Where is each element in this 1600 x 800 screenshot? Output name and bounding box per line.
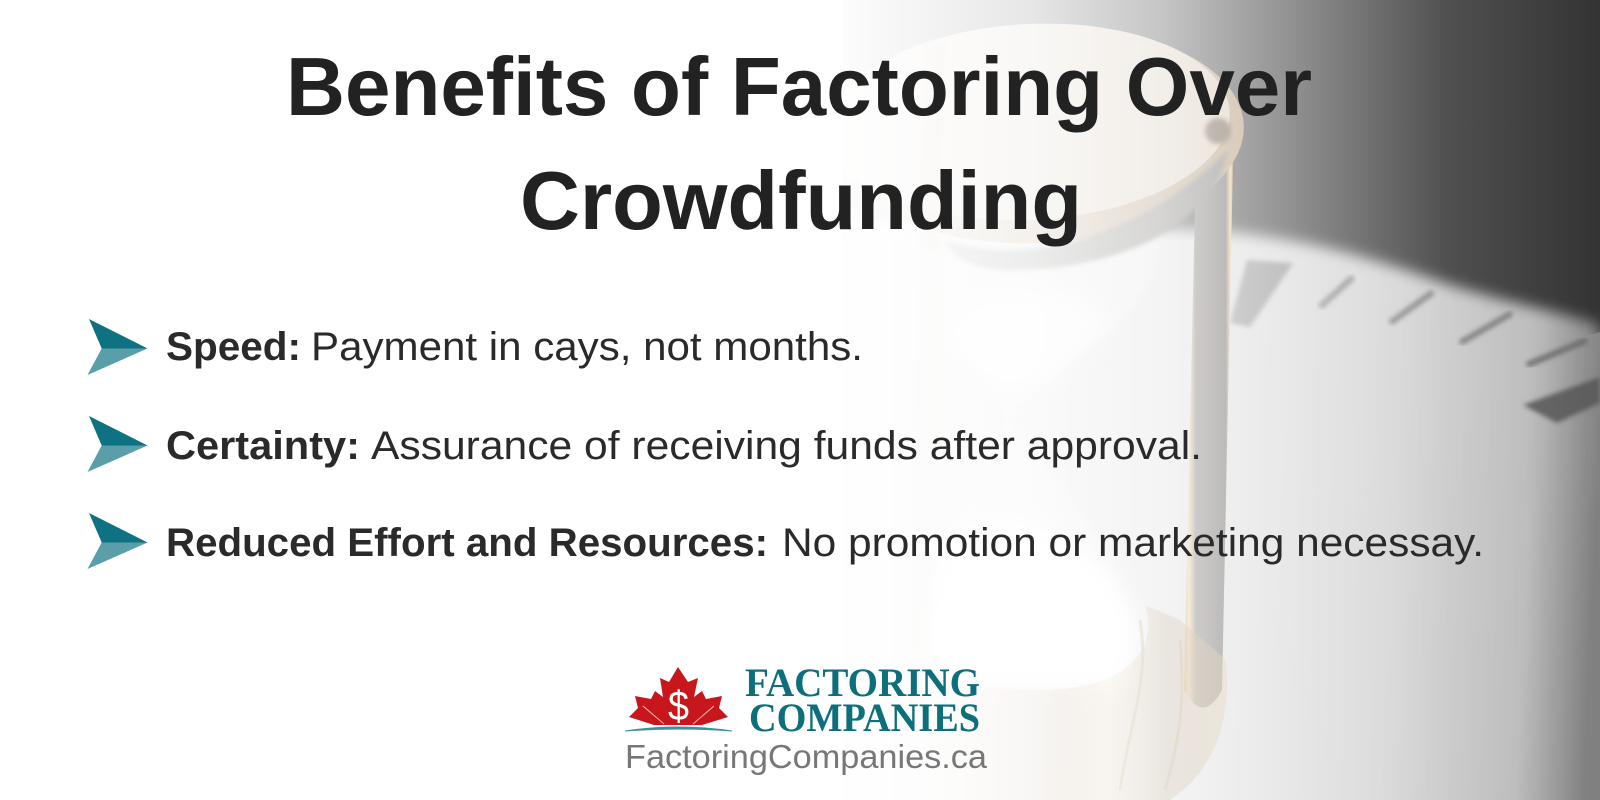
- icon: arrow: [88, 416, 148, 472]
- icon: maple leaf: $: [668, 682, 689, 729]
- benefit: speed: [88, 319, 863, 375]
- text: certainty: Certainty:: [166, 424, 360, 468]
- logo wordmark: COMPANIES: [749, 695, 980, 740]
- website url: FactoringCompanies.ca: [625, 738, 988, 775]
- text: reduced effort: No promotion or marketing necessay.: [782, 521, 1484, 565]
- text: speed: Payment in cays, not months.: [311, 325, 863, 369]
- icon: arrow: [88, 319, 148, 375]
- text: certainty: Assurance of receiving funds after approval.: [371, 424, 1202, 468]
- title: [286, 40, 1312, 247]
- title: Crowdfunding: [520, 154, 1082, 247]
- white fade over photo: [843, 0, 1600, 800]
- logo wordmark: [745, 660, 980, 740]
- icon: arrow: [88, 513, 148, 569]
- text: speed: Speed:: [166, 325, 301, 369]
- background photo: hourglass and clock dial: [825, 0, 1600, 800]
- benefit: certainty: [88, 416, 1202, 472]
- benefit: reduced effort: [88, 513, 1484, 569]
- icon: maple leaf: [625, 667, 732, 731]
- logo wordmark: FACTORING: [745, 660, 980, 705]
- text: reduced effort: Reduced Effort and Resources:: [166, 521, 768, 565]
- logo: [625, 660, 988, 775]
- title: Benefits of Factoring Over: [286, 40, 1312, 133]
